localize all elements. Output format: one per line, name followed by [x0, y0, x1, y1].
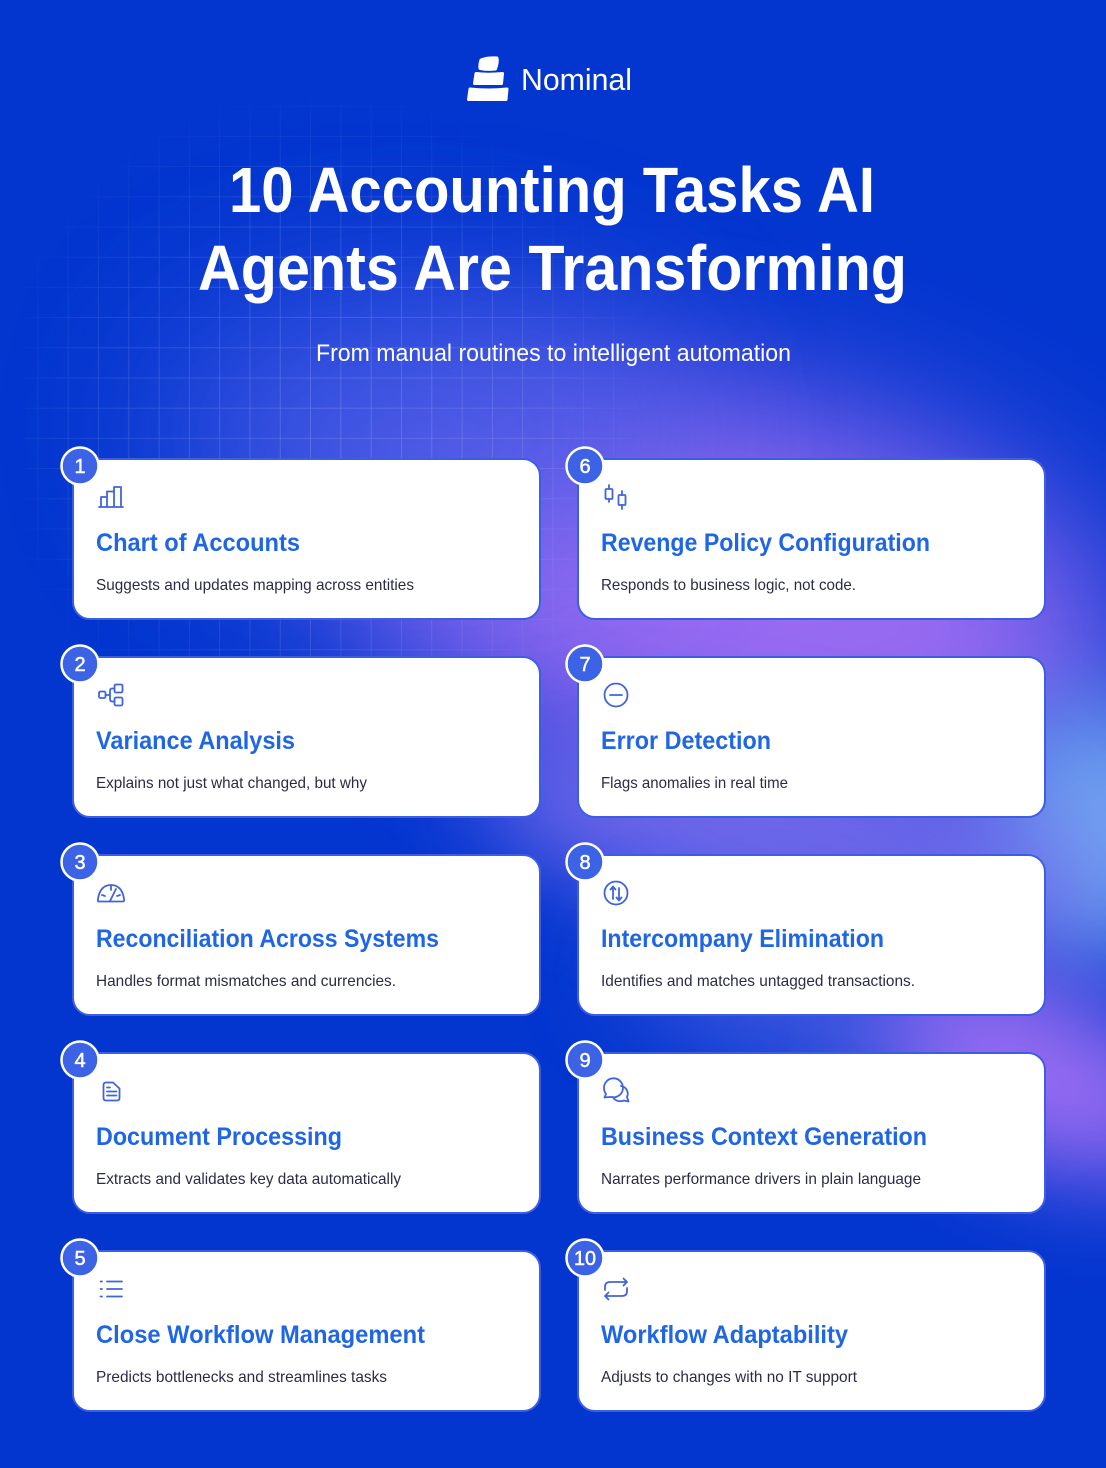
description 8: Identifies and matches untagged transactions.: [601, 973, 915, 990]
heading 3: Reconciliation Across Systems: [96, 925, 439, 953]
badge 9: 9: [579, 1050, 591, 1072]
heading 4: Document Processing: [96, 1123, 342, 1151]
card 9: business context: [566, 1042, 1045, 1213]
card 10: workflow adaptability: [566, 1240, 1045, 1411]
title: Agents Are Transforming: [198, 232, 907, 304]
badge 5: [62, 1240, 98, 1276]
badge 3: [62, 844, 98, 880]
subtitle: From manual routines to intelligent automation: [316, 340, 791, 367]
card 7: error detection: [566, 646, 1045, 817]
badge 4: [62, 1042, 98, 1078]
badge 1: [62, 448, 98, 484]
description 5: Predicts bottlenecks and streamlines tasks: [96, 1369, 387, 1386]
badge 10: [566, 1240, 604, 1276]
icon: swap arrows circle: [604, 882, 628, 904]
badge 8: 8: [579, 852, 591, 874]
badge 7: [566, 646, 604, 682]
logo: [468, 58, 632, 100]
badge 5: 5: [74, 1248, 86, 1270]
badge 3: 3: [74, 852, 86, 874]
description 4: Extracts and validates key data automatically: [96, 1171, 401, 1188]
title: [198, 154, 907, 304]
heading 8: Intercompany Elimination: [601, 925, 884, 953]
card 4: document processing: [62, 1042, 540, 1213]
background gradient: [25, 112, 1106, 1251]
heading 1: Chart of Accounts: [96, 529, 300, 557]
description 6: Responds to business logic, not code.: [601, 577, 856, 594]
title: 10 Accounting Tasks AI: [229, 154, 875, 226]
badge 2: [62, 646, 98, 682]
logo mark: [468, 58, 507, 100]
card 3: reconciliation: [62, 844, 540, 1015]
heading 9: Business Context Generation: [601, 1123, 927, 1151]
heading 10: Workflow Adaptability: [601, 1321, 848, 1349]
badge 6: [566, 448, 604, 484]
badge 1: 1: [74, 456, 86, 478]
description 3: Handles format mismatches and currencies.: [96, 973, 396, 990]
icon: minus circle: [604, 684, 628, 706]
badge 4: 4: [74, 1050, 86, 1072]
badge 10: 10: [574, 1248, 596, 1270]
description 10: Adjusts to changes with no IT support: [601, 1369, 858, 1386]
badge 8: [566, 844, 604, 880]
description 7: Flags anomalies in real time: [601, 775, 788, 792]
icon: list: [100, 1282, 122, 1296]
icon: chat bubbles: [604, 1078, 628, 1102]
description 1: Suggests and updates mapping across entities: [96, 577, 414, 594]
card 5: close workflow: [62, 1240, 540, 1411]
badge 6: 6: [579, 456, 591, 478]
badge 9: [566, 1042, 604, 1078]
heading 2: Variance Analysis: [96, 727, 295, 755]
description 2: Explains not just what changed, but why: [96, 775, 367, 792]
description 9: Narrates performance drivers in plain language: [601, 1171, 921, 1188]
heading 6: Revenge Policy Configuration: [601, 529, 930, 557]
icon: repeat arrows: [605, 1278, 627, 1300]
card 1: chart of accounts: [62, 448, 540, 619]
card 6: revenue policy: [566, 448, 1045, 619]
icon: candlesticks: [606, 485, 626, 509]
icon: document: [104, 1082, 120, 1100]
icon: gauge: [98, 885, 124, 902]
icon: bar chart: [99, 487, 123, 507]
heading 7: Error Detection: [601, 727, 771, 755]
card 2: variance analysis: [62, 646, 540, 817]
badge 7: 7: [579, 654, 591, 676]
badge 2: 2: [74, 654, 86, 676]
icon: hierarchy: [99, 684, 122, 706]
logo wordmark: Nominal: [521, 62, 632, 97]
heading 5: Close Workflow Management: [96, 1321, 426, 1349]
card 8: intercompany elimination: [566, 844, 1045, 1015]
